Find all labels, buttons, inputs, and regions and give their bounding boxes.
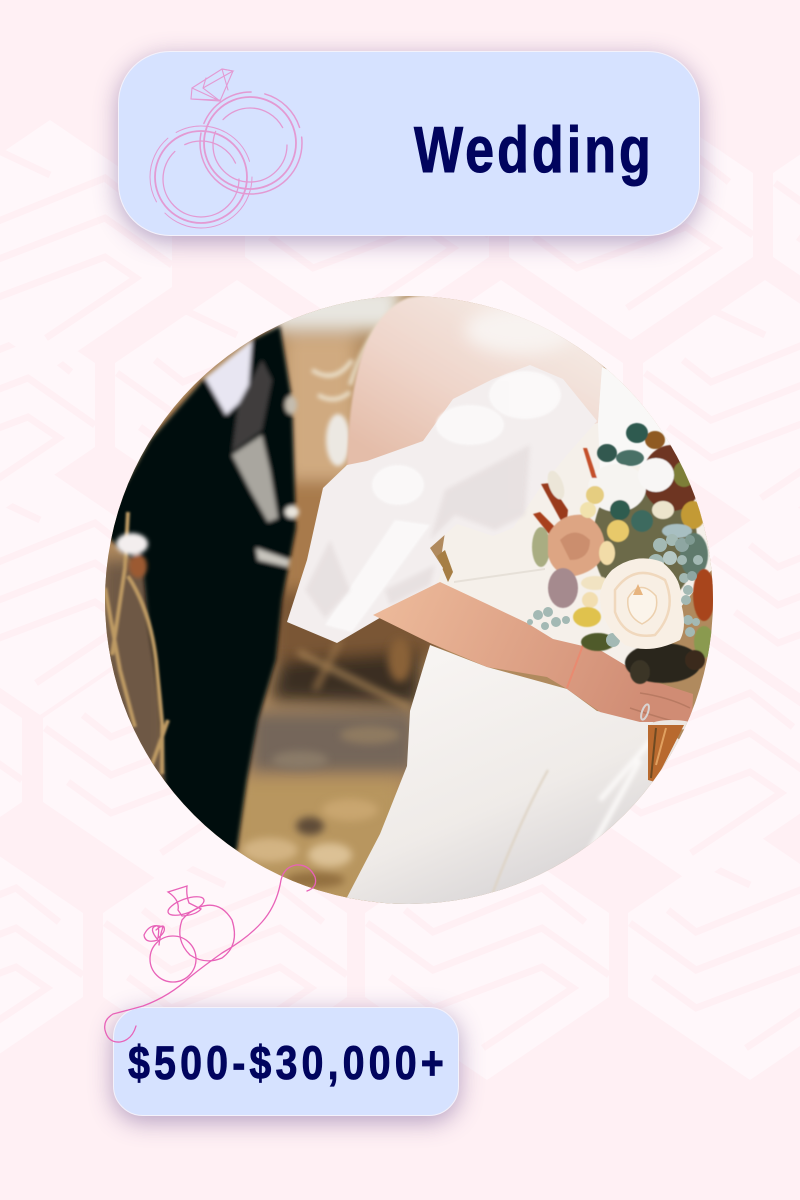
straws (105, 512, 168, 774)
white peony (600, 558, 684, 649)
lower dress (343, 645, 710, 905)
hair (312, 297, 425, 399)
bouquet stems (648, 725, 684, 782)
title text: Wedding (414, 115, 651, 186)
bracelet thread (567, 637, 586, 688)
blurred backdrop (100, 285, 440, 910)
bouquet (527, 423, 715, 684)
arm and hand (373, 582, 693, 722)
right ring (200, 92, 302, 194)
bodice and upper dress (437, 367, 720, 680)
ribbon line (105, 865, 316, 1042)
photo: bride and groom (105, 296, 713, 904)
price card (113, 1007, 459, 1116)
bride figure (150, 936, 196, 982)
ground details (242, 638, 412, 888)
bride skin (347, 292, 604, 470)
price text: $500-$30,000+ (128, 1038, 444, 1090)
top hat (168, 886, 201, 916)
diamond (191, 69, 233, 101)
sleeve (287, 365, 597, 643)
left ring (150, 126, 252, 228)
bow (144, 926, 164, 945)
groom figure (180, 905, 234, 961)
groom suit (100, 326, 299, 860)
berry clusters (527, 534, 703, 647)
panel: title card (118, 51, 700, 236)
ring (639, 703, 651, 721)
